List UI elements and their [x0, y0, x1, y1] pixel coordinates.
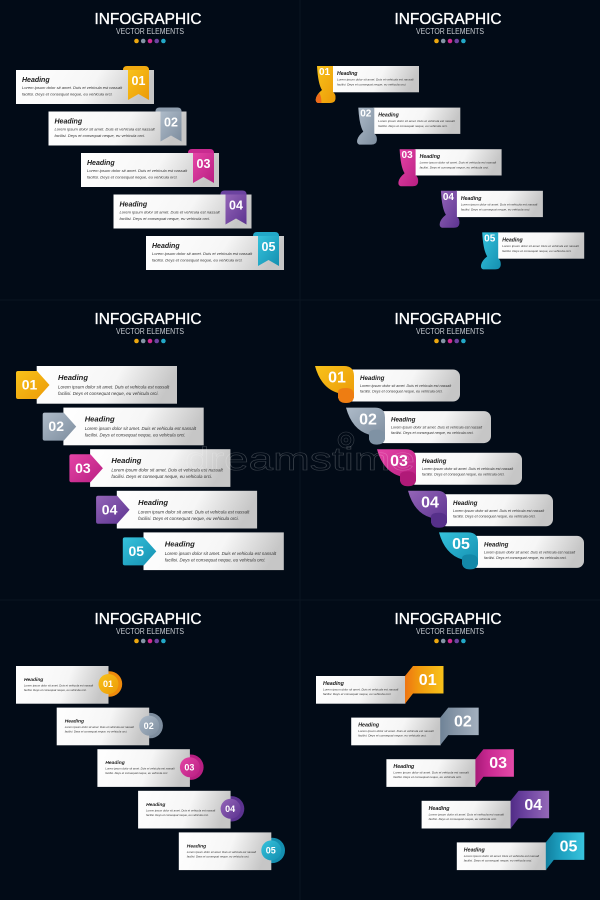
step 03: Heading — [420, 154, 441, 160]
step 05: facilisi. Deys et consequat neque, eu vehicula orci. — [464, 858, 532, 862]
title block — [394, 311, 502, 343]
title block: INFOGRAPHIC — [394, 611, 502, 628]
title block: INFOGRAPHIC — [394, 311, 502, 328]
step 03: 03 — [489, 755, 507, 772]
step 01 — [16, 666, 122, 704]
step 04: Heading — [453, 500, 478, 507]
step 01: 01 — [419, 672, 437, 689]
step 02: Heading — [378, 113, 400, 119]
step 04: Lorem ipsum dolor sit amet. Duis et vehicula est nassalt — [461, 202, 538, 206]
step 02: 02 — [454, 714, 472, 731]
step 04: Heading — [429, 806, 450, 812]
step 05: 05 — [452, 536, 470, 553]
step 01: 01 — [22, 377, 37, 393]
step 02: Lorem ipsum dolor sit amet. Duis et vehicula est nassalt — [54, 126, 155, 132]
step 02: facilisi. Deys et consequat neque, eu vehicula orci. — [54, 133, 145, 138]
step 01 — [16, 66, 154, 104]
step 02: Lorem ipsum dolor sit amet. Duis et vehicula est nassalt — [85, 426, 197, 431]
step 03: 03 — [197, 157, 210, 171]
step 05: Lorem ipsum dolor sit amet. Duis et vehicula est nassalt — [464, 854, 539, 858]
step 05: Heading — [484, 541, 509, 548]
step 04: 04 — [524, 797, 542, 814]
step 04: facilisi. Deys et consequat neque, eu vehicula orci. — [120, 216, 210, 221]
title block: VECTOR ELEMENTS — [416, 627, 484, 636]
step 01: Lorem ipsum dolor sit amet. Duis et vehicula est nassalt — [24, 684, 93, 688]
step 01: Heading — [337, 71, 358, 77]
step 05: Heading — [187, 843, 206, 849]
step 02: Lorem ipsum dolor sit amet. Duis et vehicula est nassalt — [391, 426, 483, 430]
step 04 — [440, 191, 543, 228]
step 01: facilisi. Deys et consequat neque, eu vehicula orci. — [360, 390, 443, 394]
panel: circle badges — [16, 611, 285, 870]
step 03: Lorem ipsum dolor sit amet. Duis et vehicula est nassalt — [111, 468, 223, 473]
step 02: Heading — [358, 723, 380, 729]
step 01: 01 — [319, 67, 330, 78]
title block: VECTOR ELEMENTS — [116, 327, 184, 336]
step 02: Heading — [54, 118, 83, 126]
step 01: Lorem ipsum dolor sit amet. Duis et vehicula est nassalt — [58, 384, 170, 390]
step 01 — [316, 666, 444, 704]
step 05: Heading — [502, 237, 523, 243]
step 04: 04 — [443, 192, 454, 203]
step 03: Lorem ipsum dolor sit amet. Duis et vehicula est nassalt — [87, 168, 188, 173]
step 02: Lorem ipsum dolor sit amet. Duis et vehicula est nassalt — [65, 725, 134, 729]
step 05: facilisi. Deys et consequat neque, eu vehicula orci. — [165, 557, 266, 562]
title block: INFOGRAPHIC — [94, 311, 202, 328]
step 03 — [69, 449, 230, 487]
step 05: Heading — [464, 847, 485, 853]
step 05 — [179, 832, 285, 870]
step 04: 04 — [225, 804, 235, 814]
step 04 — [96, 491, 257, 528]
step 04: Heading — [138, 498, 168, 507]
step 05 — [123, 532, 284, 570]
step 02 — [57, 708, 163, 745]
step 03: Lorem ipsum dolor sit amet. Duis et vehicula est nassalt — [422, 467, 514, 471]
step 03: 03 — [184, 762, 194, 772]
step 05: 05 — [129, 543, 144, 559]
step 03 — [386, 749, 514, 787]
step 05: 05 — [484, 233, 496, 244]
step 01: 01 — [132, 74, 145, 88]
step 03: 03 — [402, 150, 413, 161]
step 01 — [16, 366, 177, 404]
step 01: facilisi. Deys et consequat neque, eu vehicula orci. — [58, 391, 159, 396]
title block: INFOGRAPHIC — [394, 11, 502, 28]
step 04: Lorem ipsum dolor sit amet. Duis et vehicula est nassalt — [138, 509, 250, 514]
step 01: Heading — [360, 375, 385, 382]
step 04: Lorem ipsum dolor sit amet. Duis et vehicula est nassalt — [453, 509, 545, 513]
step 05 — [457, 832, 584, 870]
step 03: Heading — [422, 458, 447, 465]
step 02: Lorem ipsum dolor sit amet. Duis et vehicula est nassalt — [378, 119, 455, 123]
step 03: facilisi. Deys et consequat neque, eu vehicula orci. — [393, 775, 462, 779]
step 04: facilisi. Deys et consequat neque, eu vehicula orci. — [138, 516, 239, 521]
step 05 — [439, 532, 584, 569]
step 02: 02 — [360, 109, 372, 120]
panel: folded tags — [316, 611, 584, 870]
step 04: Heading — [120, 202, 148, 208]
step 04 — [114, 190, 252, 228]
step 02: facilisi. Deys et consequat neque, eu vehicula orci. — [65, 730, 128, 734]
step 05 — [481, 232, 584, 269]
step 03 — [97, 749, 204, 787]
title block: VECTOR ELEMENTS — [116, 627, 184, 636]
step 02: 02 — [164, 116, 178, 130]
watermark: dreamstime — [185, 441, 415, 477]
step 05: facilisi. Deys et consequat neque, eu vehicula orci. — [502, 249, 572, 253]
step 01: Lorem ipsum dolor sit amet. Duis et vehicula est nassalt — [337, 78, 414, 82]
step 04: facilisi. Deys et consequat neque, eu vehicula orci. — [461, 207, 530, 211]
panel: leaf tags — [315, 311, 584, 569]
panel: curled tabs — [316, 11, 584, 269]
step 03 — [81, 149, 219, 187]
step 03 — [377, 449, 522, 486]
step 01 — [316, 66, 419, 103]
step 05: Lorem ipsum dolor sit amet. Duis et vehicula est nassalt — [187, 850, 256, 854]
step 05: Lorem ipsum dolor sit amet. Duis et vehicula est nassalt — [152, 251, 253, 256]
step 02: facilisi. Deys et consequat neque, eu vehicula orci. — [358, 734, 427, 738]
title block: INFOGRAPHIC — [94, 11, 202, 28]
step 05: facilisi. Deys et consequat neque, eu vehicula orci. — [152, 258, 243, 262]
step 03: 03 — [390, 453, 408, 470]
step 03: Heading — [105, 760, 125, 766]
step 05: facilisi. Deys et consequat neque, eu vehicula orci. — [484, 556, 567, 560]
step 01: 01 — [103, 679, 113, 689]
step 02: facilisi. Deys et consequat neque, eu vehicula orci. — [378, 124, 448, 128]
step 03: Heading — [111, 456, 142, 465]
step 04: 04 — [229, 198, 243, 212]
step 05: Lorem ipsum dolor sit amet. Duis et vehicula est nassalt — [165, 551, 277, 556]
step 04 — [422, 791, 549, 828]
step 01: Lorem ipsum dolor sit amet. Duis et vehicula est nassalt — [323, 688, 399, 692]
panel: arrow tags — [16, 311, 284, 570]
title block: VECTOR ELEMENTS — [416, 27, 484, 36]
step 04: Heading — [461, 196, 482, 202]
step 02: 02 — [144, 721, 154, 731]
title block — [94, 611, 202, 643]
step 04: facilisi. Deys et consequat neque, eu vehicula orci. — [453, 514, 536, 518]
step 04: facilisi. Deys et consequat neque, eu vehicula orci. — [146, 813, 209, 817]
step 03: facilisi. Deys et consequat neque, eu vehicula orci. — [105, 771, 168, 775]
step 04: Lorem ipsum dolor sit amet. Duis et vehicula est nassalt — [120, 210, 220, 214]
step 03: facilisi. Deys et consequat neque, eu vehicula orci. — [87, 174, 178, 180]
step 01: facilisi. Deys et consequat neque, eu vehicula orci. — [323, 692, 391, 696]
title block — [394, 611, 502, 643]
step 02: facilisi. Deys et consequat neque, eu vehicula orci. — [85, 433, 186, 438]
step 02 — [351, 708, 479, 745]
step 04: Lorem ipsum dolor sit amet. Duis et vehicula est nassalt — [146, 808, 215, 812]
step 02 — [346, 408, 491, 445]
step 03: 03 — [75, 460, 91, 476]
step 01: Heading — [58, 373, 88, 382]
title block — [94, 311, 202, 343]
step 05: 05 — [560, 838, 577, 855]
watermark — [185, 432, 415, 477]
step 01: Lorem ipsum dolor sit amet. Duis et vehicula est nassalt — [22, 85, 123, 90]
step 01: Lorem ipsum dolor sit amet. Duis et vehicula est nassalt — [360, 384, 452, 388]
step 05: Heading — [165, 539, 195, 548]
step 03: Lorem ipsum dolor sit amet. Duis et vehicula est nassalt — [420, 161, 496, 165]
step 02 — [357, 108, 460, 145]
step 04: facilisi. Deys et consequat neque, eu vehicula orci. — [429, 817, 497, 821]
step 01: facilisi. Deys et consequat neque, eu vehicula orci. — [24, 688, 87, 692]
step 03 — [398, 149, 502, 186]
step 01: facilisi. Deys et consequat neque, eu vehicula orci. — [337, 82, 406, 86]
step 01: Heading — [22, 77, 50, 84]
step 04: 04 — [102, 501, 118, 517]
step 03: facilisi. Deys et consequat neque, eu vehicula orci. — [420, 166, 489, 170]
step 04 — [408, 491, 553, 528]
step 04: Heading — [146, 802, 165, 808]
title block: VECTOR ELEMENTS — [416, 327, 484, 336]
step 03: Lorem ipsum dolor sit amet. Duis et vehicula est nassalt — [105, 767, 175, 771]
step 02: facilisi. Deys et consequat neque, eu vehicula orci. — [391, 431, 474, 435]
title block — [94, 11, 202, 43]
step 03: facilisi. Deys et consequat neque, eu vehicula orci. — [422, 473, 505, 477]
step 02: Heading — [391, 417, 416, 424]
step 05: Lorem ipsum dolor sit amet. Duis et vehicula est nassalt — [484, 550, 576, 554]
step 02: Lorem ipsum dolor sit amet. Duis et vehicula est nassalt — [358, 729, 434, 733]
title block — [394, 11, 502, 43]
step 05: 05 — [266, 846, 276, 856]
step 03: Heading — [87, 160, 115, 167]
step 05: Heading — [152, 243, 180, 250]
step 01: Heading — [24, 677, 43, 683]
step 05: facilisi. Deys et consequat neque, eu vehicula orci. — [187, 854, 250, 858]
step 01 — [315, 366, 460, 403]
step 02: 02 — [48, 418, 64, 434]
step 04 — [138, 791, 244, 828]
step 01: 01 — [328, 370, 346, 387]
title block: VECTOR ELEMENTS — [116, 27, 184, 36]
step 02: Heading — [85, 415, 115, 424]
step 01: Heading — [323, 681, 345, 687]
step 03: Heading — [393, 764, 415, 770]
step 03: Lorem ipsum dolor sit amet. Duis et vehicula est nassalt — [393, 771, 469, 775]
step 04: Lorem ipsum dolor sit amet. Duis et vehicula est nassalt — [429, 812, 504, 816]
step 01: facilisi. Deys et consequat neque, eu vehicula orci. — [22, 92, 113, 96]
step 02 — [48, 108, 186, 146]
step 03: facilisi. Deys et consequat neque, eu vehicula orci. — [111, 474, 212, 479]
panel: ribbon bookmarks — [16, 11, 284, 270]
step 05: Lorem ipsum dolor sit amet. Duis et vehicula est nassalt — [502, 244, 579, 248]
step 05 — [146, 232, 284, 270]
title block: INFOGRAPHIC — [94, 611, 202, 628]
step 02 — [43, 408, 204, 445]
step 04: 04 — [421, 494, 439, 511]
step 02: Heading — [65, 719, 84, 725]
step 05: 05 — [262, 240, 275, 254]
step 02: 02 — [359, 411, 377, 428]
